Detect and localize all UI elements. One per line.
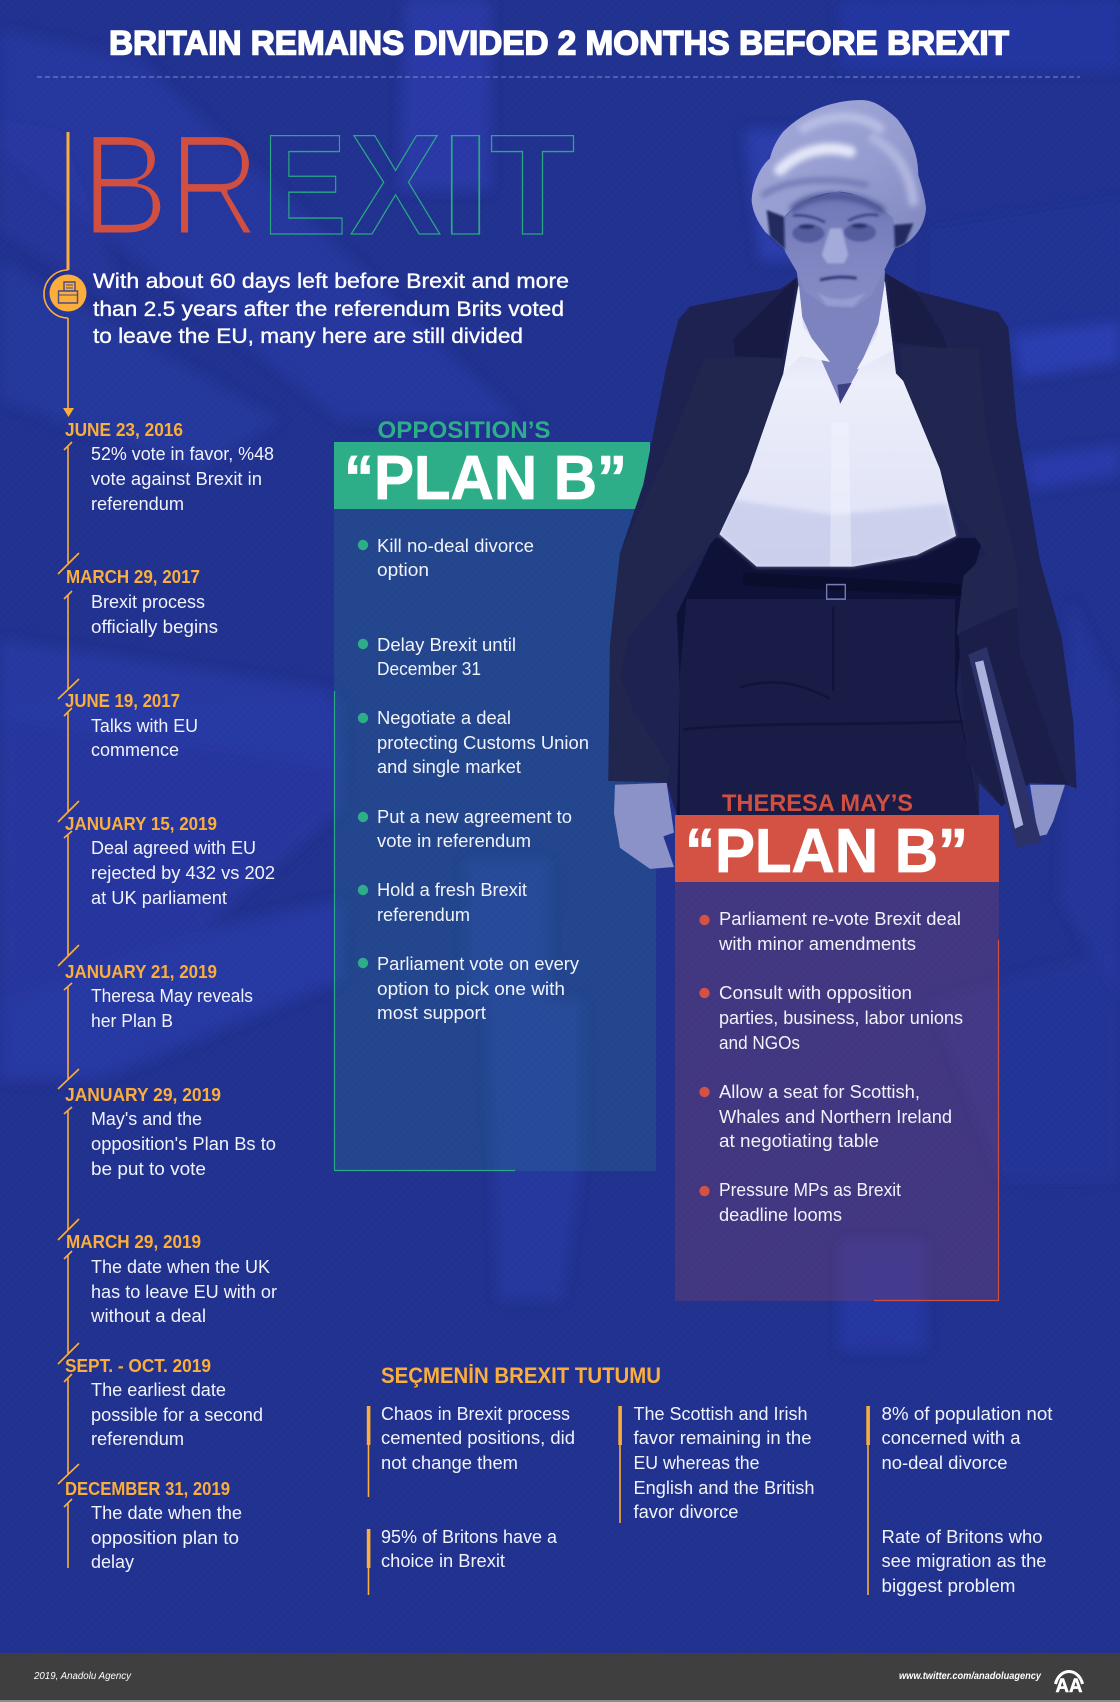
fact: 8 percent and migration <box>866 1404 1052 1596</box>
intro text <box>93 269 569 348</box>
fact: Scottish and Irish: The Scottish and Irish <box>634 1404 808 1424</box>
event: June 19, 2017: JUNE 19, 2017 <box>65 691 180 711</box>
event: June 23, 2016: referendum <box>91 494 184 514</box>
opposition plan B list <box>358 536 589 1023</box>
mouth <box>820 277 857 280</box>
fact: Scottish and Irish: English and the British <box>634 1478 814 1498</box>
event: January 29, 2019: May's and the <box>91 1109 202 1129</box>
icon: Anadolu Agency logo: AA <box>1056 1676 1083 1697</box>
Theresa May plan B list <box>699 909 963 1225</box>
Theresa May plan B list: Whales and Northern Ireland <box>719 1107 952 1127</box>
face <box>783 192 895 308</box>
fact: 8 percent and migration: 8% of population not <box>882 1404 1052 1424</box>
opposition plan B list: Put a new agreement to <box>377 807 572 827</box>
panel: Theresa May plan B: “PLAN B” <box>685 817 968 886</box>
hands <box>614 783 674 869</box>
event: January 21, 2019: her Plan B <box>91 1011 173 1031</box>
event: March 29, 2019: The date when the UK <box>91 1257 270 1277</box>
event: January 21, 2019: Theresa May reveals <box>91 986 253 1006</box>
event: March 29, 2019 <box>58 1232 277 1364</box>
heading: BREXIT wordmark: E <box>262 106 347 265</box>
fact: 8 percent and migration: biggest problem <box>882 1576 1016 1596</box>
opposition plan B list: Parliament vote on every <box>377 954 579 974</box>
fact: 8 percent and migration: no-deal divorce <box>882 1453 1008 1473</box>
event: December 31, 2019: DECEMBER 31, 2019 <box>65 1479 230 1499</box>
heading: BREXIT wordmark <box>80 106 575 265</box>
Theresa May plan B list: Parliament re-vote Brexit deal <box>719 909 961 929</box>
event: January 15, 2019 <box>58 814 275 966</box>
fact: Scottish and Irish: favor divorce <box>634 1502 738 1522</box>
fact: chaos in Brexit process: not change them <box>381 1453 518 1473</box>
belt <box>743 572 962 596</box>
heading: voter attitudes: SEÇMENİN BREXIT TUTUMU <box>381 1363 661 1388</box>
event: January 15, 2019: Deal agreed with EU <box>91 838 256 858</box>
heading: BREXIT wordmark: B <box>80 106 170 265</box>
event: January 21, 2019: JANUARY 21, 2019 <box>65 962 217 982</box>
fact: Scottish and Irish: EU whereas the <box>634 1453 760 1473</box>
event: Sept - Oct 2019: SEPT. - OCT. 2019 <box>65 1356 211 1376</box>
event: June 19, 2017: Talks with EU <box>91 716 198 736</box>
event: December 31, 2019: delay <box>91 1552 134 1572</box>
Theresa May plan B list: at negotiating table <box>719 1131 879 1151</box>
fact: chaos in Brexit process <box>367 1404 575 1497</box>
Theresa May plan B list: Allow a seat for Scottish, <box>719 1082 920 1102</box>
event: December 31, 2019: opposition plan to <box>91 1528 239 1548</box>
opposition plan B list: Kill no-deal divorce <box>377 536 534 556</box>
opposition plan B list: December 31 <box>377 659 481 679</box>
opposition plan B list: most support <box>377 1003 486 1023</box>
hair shadow at cheeks <box>767 210 785 250</box>
event: March 29, 2017: Brexit process <box>91 592 205 612</box>
fact: 95 percent have a choice: choice in Brexit <box>381 1551 505 1571</box>
event: December 31, 2019 <box>64 1479 242 1572</box>
opposition plan B list: option <box>377 560 429 580</box>
hair lights and shadows <box>763 117 913 210</box>
footer: www.twitter.com/anadoluagency <box>899 1671 1041 1682</box>
footer: 2019, Anadolu Agency <box>33 1671 132 1682</box>
fact: 95 percent have a choice: 95% of Britons have a <box>381 1527 558 1547</box>
footer <box>0 1653 1120 1702</box>
head <box>752 100 926 308</box>
folder <box>968 647 1042 848</box>
event: June 23, 2016: 52% vote in favor, %48 <box>91 444 274 464</box>
Theresa May plan B list: Consult with opposition <box>719 983 912 1003</box>
event: June 23, 2016: JUNE 23, 2016 <box>65 420 183 440</box>
event: January 15, 2019: rejected by 432 vs 202 <box>91 863 275 883</box>
opposition plan B banner <box>334 442 650 509</box>
heading: BREXIT wordmark: X <box>350 106 441 265</box>
fact: Scottish and Irish <box>618 1404 814 1523</box>
intro text: than 2.5 years after the referendum Brits voted <box>93 297 564 321</box>
event: Sept - Oct 2019: possible for a second <box>91 1405 263 1425</box>
event: March 29, 2017 <box>58 567 218 699</box>
Theresa May plan B list: Pressure MPs as Brexit <box>719 1180 901 1200</box>
timeline <box>58 420 277 1572</box>
fact: 8 percent and migration: Rate of Britons who <box>882 1527 1042 1547</box>
neck <box>797 270 885 402</box>
panel: Theresa May plan B: THERESA MAY’S <box>722 790 913 817</box>
event: January 29, 2019: opposition's Plan Bs to <box>91 1134 276 1154</box>
heading: BREXIT wordmark: T <box>490 106 575 265</box>
opposition plan B list: and single market <box>377 757 521 777</box>
panel: opposition plan B background <box>334 509 656 1171</box>
fact: 8 percent and migration: concerned with a <box>882 1428 1021 1448</box>
event: March 29, 2019: without a deal <box>90 1306 206 1326</box>
intro text: to leave the EU, many here are still divided <box>93 324 523 348</box>
hair <box>752 100 926 250</box>
opposition plan B list: referendum <box>377 905 470 925</box>
event: June 19, 2017 <box>58 691 198 822</box>
event: December 31, 2019: The date when the <box>91 1503 242 1523</box>
timeline stem with ballot icon <box>44 132 86 417</box>
heading: BREXIT wordmark: I <box>439 106 492 265</box>
nose <box>822 228 848 263</box>
fact: chaos in Brexit process: cemented positions, did <box>381 1428 575 1448</box>
event: March 29, 2019: MARCH 29, 2019 <box>66 1232 201 1252</box>
Theresa May plan B list: and NGOs <box>719 1033 800 1053</box>
opposition plan B heading: “PLAN B” <box>344 444 627 513</box>
opposition plan B list: Delay Brexit until <box>377 635 516 655</box>
intro text: With about 60 days left before Brexit and more <box>93 269 569 293</box>
event: January 29, 2019: JANUARY 29, 2019 <box>65 1085 221 1105</box>
event: January 29, 2019: be put to vote <box>91 1159 206 1179</box>
collars <box>783 285 830 373</box>
shirt <box>719 281 956 567</box>
lapels <box>608 358 783 783</box>
event: Sept - Oct 2019: The earliest date <box>91 1380 226 1400</box>
heading: BREXIT wordmark: R <box>168 106 261 265</box>
portrait of Theresa May <box>608 100 1077 869</box>
opposition plan B list: vote in referendum <box>377 831 531 851</box>
event: March 29, 2017: officially begins <box>91 617 218 637</box>
event: January 15, 2019: at UK parliament <box>91 888 227 908</box>
opposition plan B heading: OPPOSITION’S <box>378 417 550 444</box>
placket <box>830 423 852 567</box>
fact: chaos in Brexit process: Chaos in Brexit process <box>381 1404 570 1424</box>
opposition plan B list: option to pick one with <box>377 979 565 999</box>
Theresa May plan B list: with minor amendments <box>718 934 916 954</box>
opposition plan B list: protecting Customs Union <box>377 733 589 753</box>
event: January 29, 2019 <box>58 1085 276 1240</box>
event: March 29, 2017: MARCH 29, 2017 <box>66 567 200 587</box>
opposition plan B list: Hold a fresh Brexit <box>377 880 527 900</box>
event: Sept - Oct 2019: referendum <box>91 1429 184 1449</box>
fact: Scottish and Irish: favor remaining in the <box>634 1428 812 1448</box>
body <box>608 270 1077 869</box>
event: June 19, 2017: commence <box>91 740 179 760</box>
event: June 23, 2016: vote against Brexit in <box>91 469 262 489</box>
event: Sept - Oct 2019 <box>58 1356 263 1484</box>
event: January 21, 2019 <box>58 962 253 1089</box>
Theresa May plan B list: deadline looms <box>719 1205 842 1225</box>
jacket <box>608 274 1077 815</box>
eyes and brows <box>792 215 878 307</box>
event: January 15, 2019: JANUARY 15, 2019 <box>65 814 217 834</box>
event: June 23, 2016 <box>58 420 274 574</box>
title: BRITAIN REMAINS DIVIDED 2 MONTHS BEFORE BREXIT <box>109 24 1009 62</box>
sleeve fold <box>958 607 1067 807</box>
event: March 29, 2019: has to leave EU with or <box>91 1282 277 1302</box>
opposition plan B list: Negotiate a deal <box>377 708 511 728</box>
fact: 95 percent have a choice <box>367 1527 558 1595</box>
fact: 8 percent and migration: see migration as the <box>882 1551 1046 1571</box>
waist shadow and skirt <box>677 538 983 815</box>
Theresa May plan B list: parties, business, labor unions <box>719 1008 963 1028</box>
panel: Theresa May plan B <box>675 790 999 1301</box>
